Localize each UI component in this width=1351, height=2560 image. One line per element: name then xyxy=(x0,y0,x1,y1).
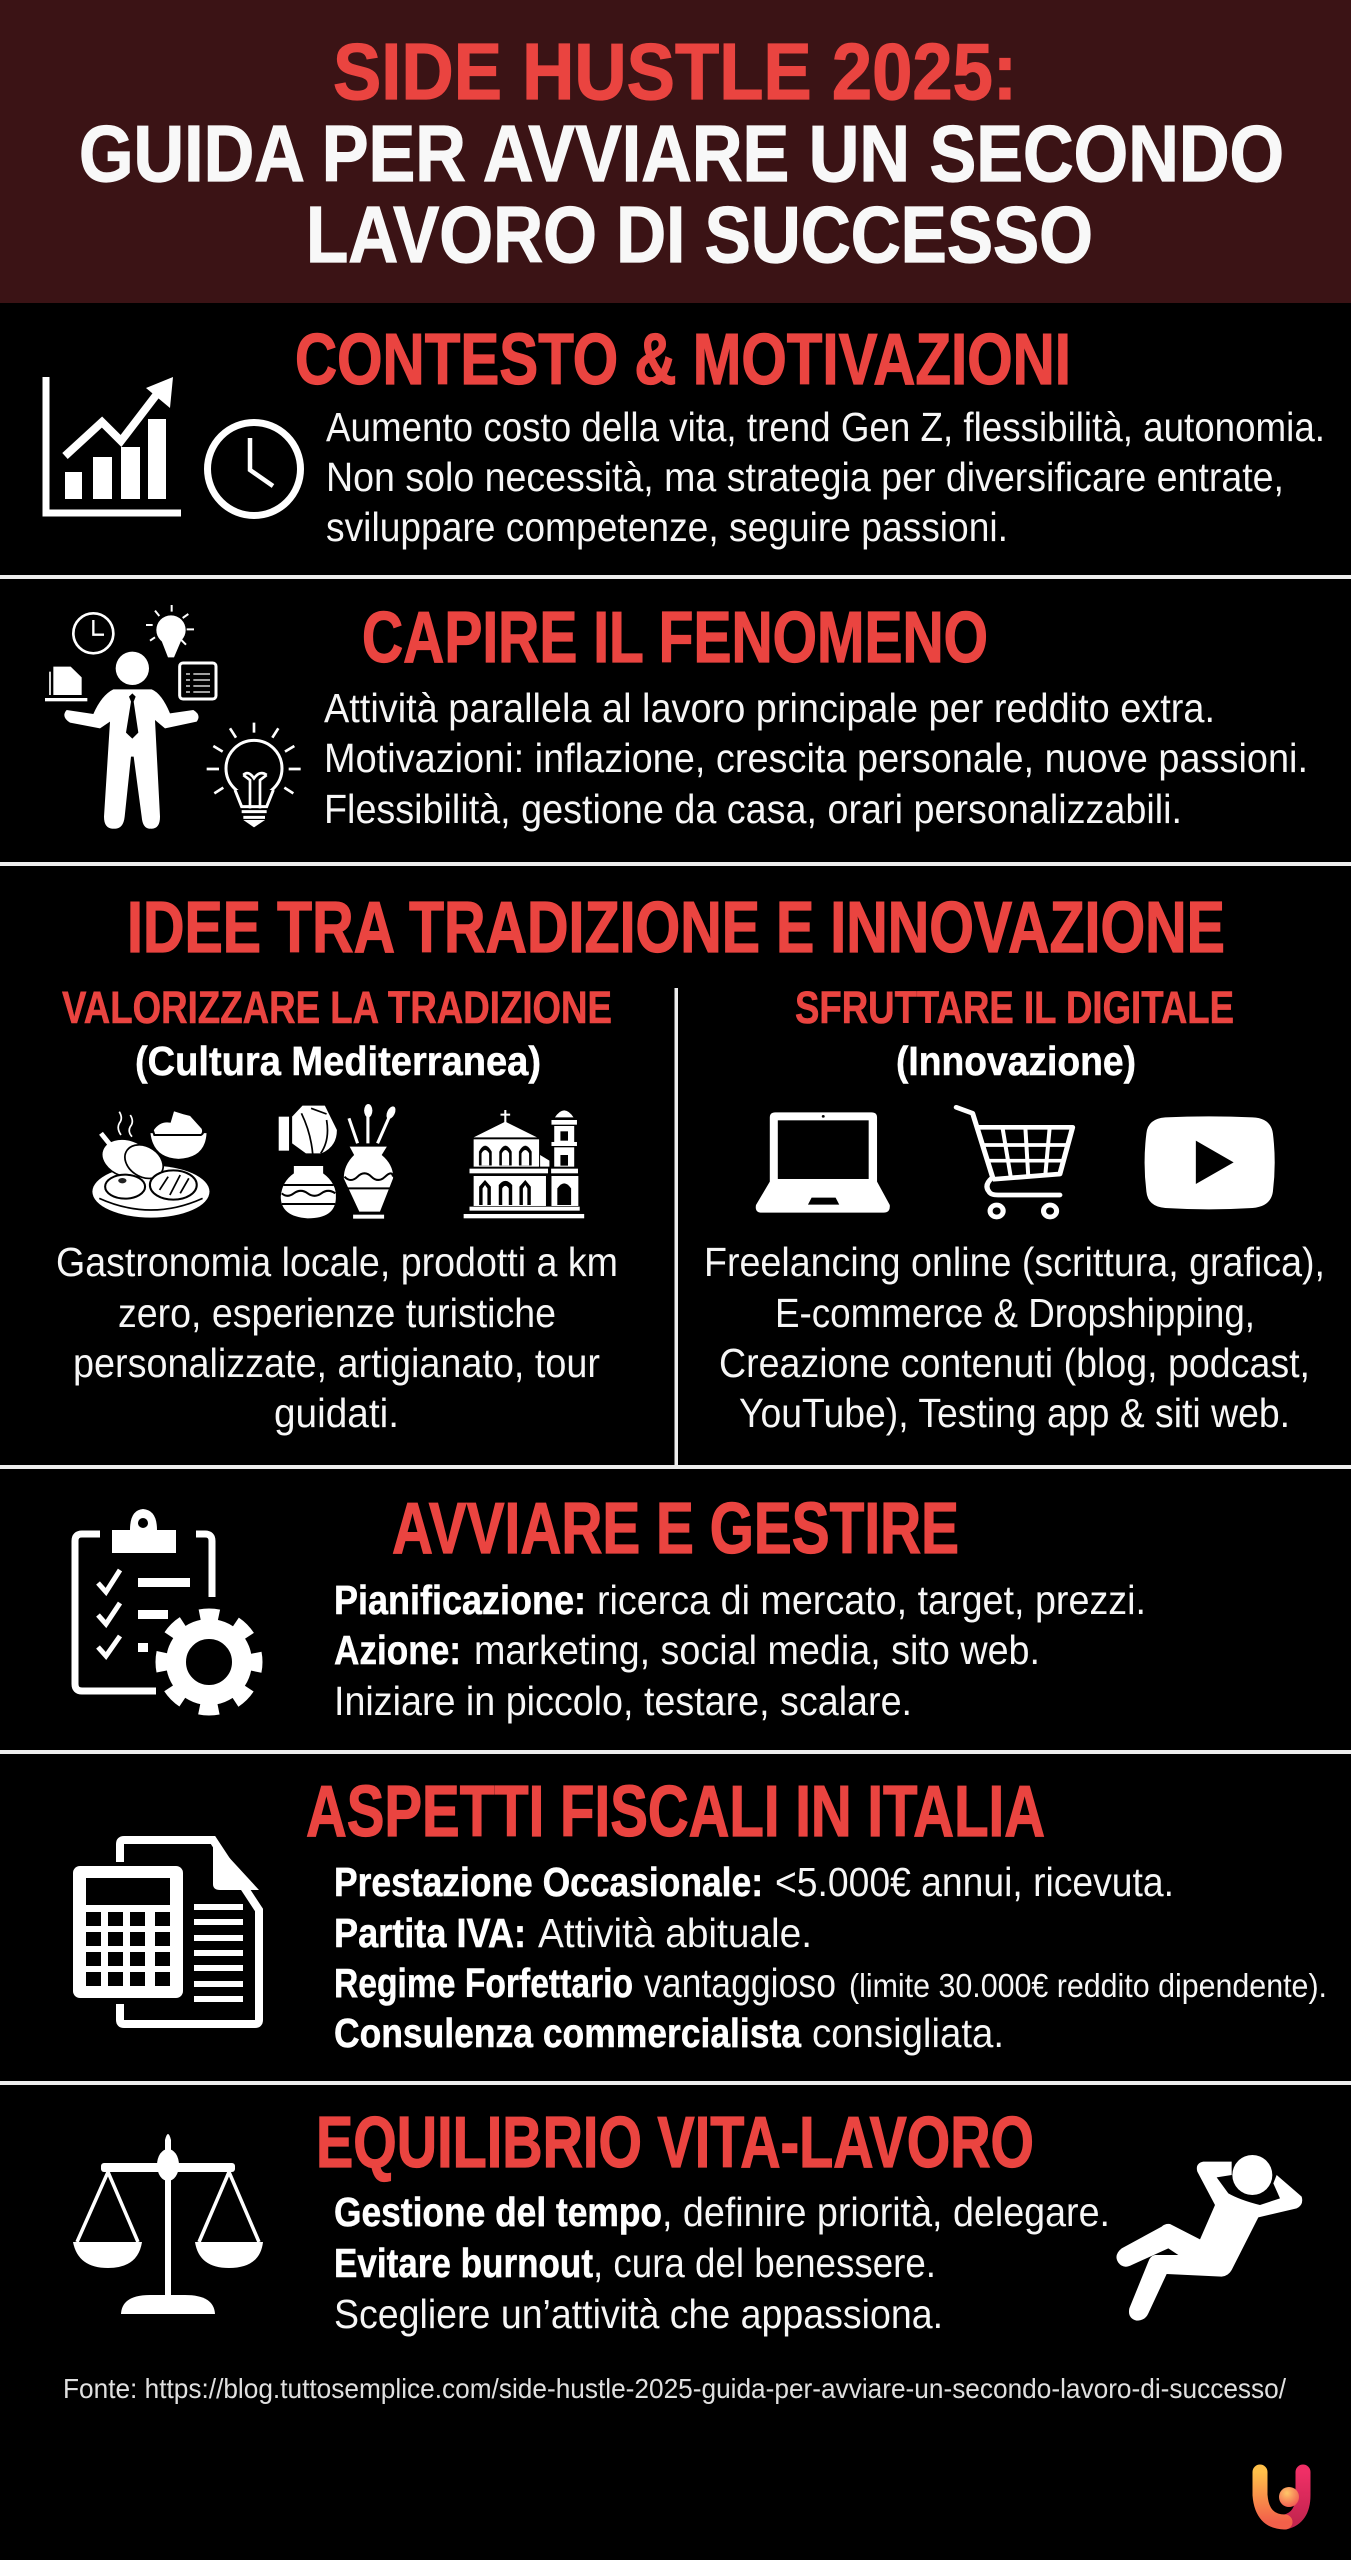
panel: idee tra tradizione e innovazione xyxy=(56,888,1325,1467)
heading: contesto: CONTESTO & MOTIVAZIONI xyxy=(295,320,1071,400)
text: digitale body: YouTube), Testing app & siti web. xyxy=(739,1390,1290,1436)
text: tradizione body: personalizzate, artigianato, tour xyxy=(73,1340,600,1386)
text: digitale body: E-commerce & Dropshipping, xyxy=(775,1290,1255,1336)
text: equilibrio body: , definire priorità, delegare. xyxy=(662,2189,1110,2235)
heading: aspetti fiscali: ASPETTI FISCALI IN ITALIA xyxy=(306,1772,1045,1852)
text: contesto body xyxy=(326,404,1325,550)
text: contesto body: Non solo necessità, ma strategia per diversificare entrate, xyxy=(326,454,1284,500)
text: fiscali body: Attività abituale. xyxy=(538,1910,812,1956)
icon: clock xyxy=(208,422,300,516)
subheading: valorizzare la tradizione: VALORIZZARE LA TRADIZIONE xyxy=(62,982,612,1033)
title: SIDE HUSTLE 2025: xyxy=(333,27,1017,116)
text: tradizione body: guidati. xyxy=(274,1390,399,1436)
text: avviare body: marketing, social media, sito web. xyxy=(474,1627,1040,1673)
text: equilibrio body: Gestione del tempo xyxy=(334,2189,662,2235)
icon: laptop xyxy=(756,1112,890,1213)
text: fiscali body: Prestazione Occasionale: xyxy=(334,1859,763,1905)
text: fiscali body xyxy=(334,1859,1327,2056)
text: equilibrio body: Scegliere un’attività che appassiona. xyxy=(334,2291,943,2337)
icon: logo xyxy=(1260,2472,1303,2522)
text: fiscali body: Regime Forfettario xyxy=(334,1960,633,2006)
text: fenomeno body: Flessibilità, gestione da casa, orari personalizzabili. xyxy=(324,786,1182,832)
source line: Fonte: https://blog.tuttosemplice.com/side-hustle-2025-guida-per-avviare-un-secondo-lavoro-di-successo/ xyxy=(63,2373,1286,2404)
heading: capire: CAPIRE IL FENOMENO xyxy=(362,598,988,678)
text: fiscali body: Consulenza commercialista xyxy=(334,2010,802,2056)
text: tradizione body xyxy=(56,1239,618,1436)
text: fiscali body: Partita IVA: xyxy=(334,1910,526,1956)
title xyxy=(79,27,1284,279)
text: tradizione body: zero, esperienze turistiche xyxy=(118,1290,556,1336)
text: avviare body: Pianificazione: xyxy=(334,1577,586,1623)
text: equilibrio body: , cura del benessere. xyxy=(593,2240,936,2286)
icon: clipboard with gear xyxy=(75,1509,256,1709)
text: contesto body: sviluppare competenze, seguire passioni. xyxy=(326,504,1008,550)
text: avviare body: ricerca di mercato, target, prezzi. xyxy=(597,1577,1146,1623)
panel: capire il fenomeno xyxy=(45,598,1308,832)
icon: video play xyxy=(1145,1116,1275,1209)
icon: person juggling tasks xyxy=(45,605,301,829)
text: avviare body: Iniziare in piccolo, testare, scalare. xyxy=(334,1678,912,1724)
text: equilibrio body: Evitare burnout xyxy=(334,2240,593,2286)
subtitle: cultura mediterranea: (Cultura Mediterranea) xyxy=(135,1038,541,1084)
text: fiscali body: vantaggioso xyxy=(644,1960,836,2006)
icon: balance scales xyxy=(73,2134,263,2314)
column: digitale xyxy=(704,982,1325,1436)
icon: church xyxy=(464,1110,584,1218)
heading: equilibrio: EQUILIBRIO VITA-LAVORO xyxy=(316,2103,1034,2183)
icon: growth chart xyxy=(46,377,181,513)
subheading: sfruttare il digitale: SFRUTTARE IL DIGITALE xyxy=(795,982,1234,1033)
panel: aspetti fiscali xyxy=(73,1772,1327,2056)
icon: relaxing person xyxy=(1116,2155,1302,2321)
text: tradizione body: Gastronomia locale, prodotti a km xyxy=(56,1239,618,1285)
text: digitale body: Creazione contenuti (blog, podcast, xyxy=(719,1340,1310,1386)
title: LAVORO DI SUCCESSO xyxy=(306,190,1093,279)
text: fenomeno body xyxy=(324,685,1308,832)
text: avviare body xyxy=(334,1577,1146,1724)
column: tradizione xyxy=(56,982,618,1436)
icon: shopping cart xyxy=(956,1107,1073,1217)
text: avviare body: Azione: xyxy=(334,1627,461,1673)
text: equilibrio body xyxy=(334,2189,1110,2337)
text: digitale body xyxy=(704,1239,1325,1436)
icon: pottery and brushes xyxy=(279,1104,397,1219)
panel: equilibrio vita-lavoro xyxy=(73,2103,1302,2337)
header band xyxy=(0,0,1351,303)
icon: food plate xyxy=(92,1110,209,1218)
text: fiscali body: consigliata. xyxy=(812,2010,1004,2056)
text: fenomeno body: Attività parallela al lavoro principale per reddito extra. xyxy=(324,685,1215,731)
text: fiscali body: <5.000€ annui, ricevuta. xyxy=(775,1859,1174,1905)
heading: avviare: AVVIARE E GESTIRE xyxy=(392,1489,959,1569)
subtitle: innovazione: (Innovazione) xyxy=(896,1038,1136,1084)
icon: calculator and document xyxy=(73,1840,259,2024)
panel: avviare e gestire xyxy=(75,1489,1146,1724)
panel: contesto e motivazioni xyxy=(46,320,1325,550)
